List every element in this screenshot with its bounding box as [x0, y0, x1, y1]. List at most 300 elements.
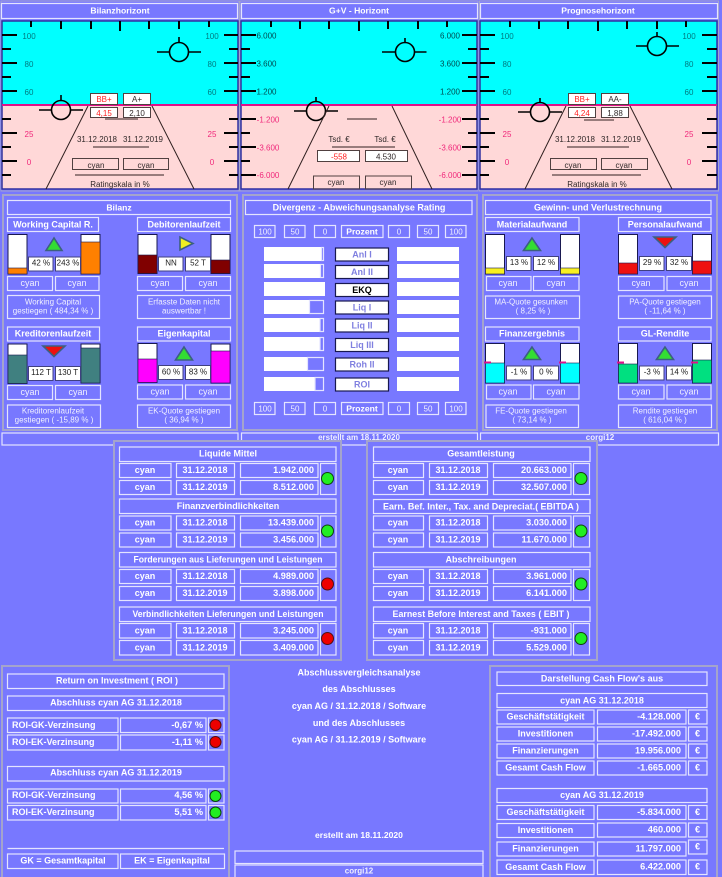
horizon display: 25: [208, 130, 217, 139]
block: cash flow 2018: -4.128.000: [637, 712, 681, 722]
card: GL-Rendite: cyan: [679, 386, 699, 396]
scale top: 100: [258, 228, 272, 236]
text block: Abschlussvergleichsanalyse: des Abschlusses: [322, 684, 396, 694]
block: Forderungen: 4.989.000: [273, 571, 314, 581]
card: GL-Rendite: GL-Rendite: [641, 328, 689, 338]
block: cash flow 2018: Investitionen: [518, 728, 573, 738]
card: Materialaufwand: cyan: [546, 278, 566, 288]
block: cash flow 2019: Gesamt Cash Flow: [505, 862, 587, 872]
block: cash flow 2019: €: [695, 862, 700, 872]
horizon display: 0: [210, 158, 215, 167]
card: GL-Rendite: Rendite gestiegen: [633, 406, 697, 416]
block: Liquide Mittel: 31.12.2019: [182, 482, 228, 492]
card: Working Capital: gestiegen ( 484,34 % ): [13, 306, 94, 316]
horizon display: cyan: [138, 161, 154, 170]
block: Abschluss 2018: -0,67 %: [171, 720, 203, 730]
block: Forderungen: 31.12.2018: [182, 571, 228, 581]
block: Verbindlichkeiten: 31.12.2018: [182, 626, 228, 636]
card: Personalaufwand: Personalaufwand: [628, 220, 702, 230]
horizon display: 25: [685, 130, 694, 139]
horizon display: 100: [22, 32, 36, 41]
card: Eigenkapital: Eigenkapital: [157, 328, 211, 338]
footer boxes: corgi12: [235, 851, 483, 877]
block: Abschreibungen: cyan: [388, 588, 408, 598]
block: Verbindlichkeiten: [120, 607, 336, 655]
heading: Divergenz: Divergenz - Abweichungsanalyse Rating: [273, 202, 445, 212]
block: Abschluss 2019: Abschluss cyan AG 31.12.2019: [50, 768, 182, 778]
block: Verbindlichkeiten: Verbindlichkeiten Lieferungen und Leistungen: [132, 609, 324, 619]
horizon display: 1.200: [256, 88, 277, 96]
block: cash flow 2019: 6.422.000: [640, 862, 681, 872]
scale top: 0: [397, 228, 402, 236]
horizon display: [2, 21, 238, 189]
heading: G+V - Horizont: G+V - Horizont: [329, 6, 389, 16]
value boxes: -558: [331, 152, 348, 162]
panel: G+V Horizont: [240, 1, 478, 191]
heading: Bilanzhorizont: Bilanzhorizont: [90, 6, 150, 16]
card: Working Capital: cyan: [67, 278, 87, 288]
horizon display: 1.200: [440, 88, 461, 96]
card: Eigenkapital: 60 %: [162, 368, 180, 376]
block: Forderungen: 3.898.000: [273, 588, 314, 598]
card: Eigenkapital: EK-Quote gestiegen: [148, 406, 220, 416]
block: Verbindlichkeiten: 3.245.000: [273, 626, 314, 636]
block: EBIT: [374, 607, 590, 655]
block: cash flow 2018: €: [695, 762, 700, 772]
horizon display: 31.12.2019: [123, 135, 164, 144]
horizon display: Tsd. €: [328, 135, 350, 144]
block: cash flow 2019: cyan AG 31.12.2019: [560, 790, 644, 800]
block: cash flow 2018: 19.956.000: [635, 746, 681, 756]
card: Kreditorenlaufzeit: gestiegen ( -15,89 % ): [15, 416, 94, 424]
horizon display: 31.12.2018: [77, 135, 118, 144]
panel: Return on Investment: [2, 666, 229, 877]
horizon display: 31.12.2018: [555, 135, 596, 144]
card: Eigenkapital: 83 %: [189, 368, 207, 376]
gauge marker 2019: [636, 32, 679, 56]
block: Finanzverbindlichkeiten: 13.439.000: [268, 518, 314, 528]
block: Abschluss 2019: ROI-EK-Verzinsung: [12, 807, 95, 817]
panel: Bilanz: [3, 195, 237, 430]
horizon display: cyan: [616, 161, 632, 170]
card: Personalaufwand: [618, 218, 712, 318]
rating boxes: 4,24: [574, 109, 590, 118]
card: Personalaufwand: 29 %: [643, 258, 661, 267]
text block: Abschlussvergleichsanalyse: Abschlussvergleichsanalyse: [297, 668, 421, 678]
card: GL-Rendite: [617, 327, 712, 428]
heading: Bilanz: Bilanz: [106, 202, 132, 212]
block: Finanzverbindlichkeiten: [120, 499, 336, 547]
rating boxes: BB+: [574, 95, 590, 104]
footer strip: corgi12: [586, 433, 615, 442]
card: GL-Rendite: 14 %: [670, 368, 688, 376]
block: cash flow 2019: €: [695, 842, 700, 852]
card: Finanzergebnis: 0 %: [539, 368, 553, 376]
block: Abschluss 2018: -1,11 %: [172, 737, 203, 747]
card: Debitorenlaufzeit: Debitorenlaufzeit: [147, 220, 221, 230]
block: cash flow 2018: €: [695, 712, 700, 722]
scale bottom: 0: [323, 404, 328, 414]
scale top: 100: [449, 228, 463, 236]
block: Gesamtleistung: 31.12.2018: [435, 465, 481, 475]
card: Personalaufwand: cyan: [631, 278, 651, 288]
card: Materialaufwand: 12 %: [537, 258, 555, 267]
block: Abschreibungen: 31.12.2018: [435, 571, 481, 581]
card: Eigenkapital: cyan: [150, 386, 170, 396]
block: Forderungen: 31.12.2019: [182, 588, 228, 598]
block: EBITDA: 31.12.2018: [435, 518, 481, 528]
card: Debitorenlaufzeit: auswertbar !: [162, 306, 206, 316]
card: Personalaufwand: ( -11,64 % ): [644, 306, 686, 316]
horizon display: -3.600: [257, 144, 280, 152]
block: cash flow 2018: Geschäftstätigkeit: [506, 712, 585, 722]
rating boxes: 2,10: [129, 109, 145, 118]
card: GL-Rendite: -3 %: [644, 368, 660, 376]
card: GL-Rendite: ( 616,04 % ): [643, 416, 687, 424]
block: Liquide Mittel: cyan: [135, 482, 155, 492]
rating boxes: [90, 94, 150, 118]
card: Working Capital: 42 %: [32, 258, 50, 268]
block: EBITDA: cyan: [388, 534, 408, 544]
rating boxes: [568, 94, 628, 118]
block: Finanzverbindlichkeiten: cyan: [135, 534, 155, 544]
block: cash flow 2019: €: [695, 807, 700, 817]
block: Liquide Mittel: 8.512.000: [273, 482, 314, 492]
horizon display: -3.600: [439, 144, 462, 152]
card: Materialaufwand: MA-Quote gesunken: [494, 298, 568, 306]
block: cash flow 2019: Finanzierungen: [512, 844, 579, 854]
card: Finanzergebnis: Finanzergebnis: [499, 328, 565, 338]
text block: Abschlussvergleichsanalyse: cyan AG / 31.12.2018 / Software: [292, 701, 426, 711]
horizon display: 0: [505, 158, 510, 167]
block: EBIT: 5.529.000: [526, 642, 567, 652]
horizon display: 60: [503, 88, 512, 97]
block: Abschluss 2018: ROI-EK-Verzinsung: [12, 737, 95, 747]
card: Working Capital: cyan: [20, 278, 40, 288]
block: Gesamtleistung: 31.12.2019: [435, 482, 481, 492]
horizon display: [241, 21, 477, 189]
card: Finanzergebnis: [484, 327, 580, 428]
block: Verbindlichkeiten: cyan: [135, 642, 155, 652]
block: cash flow 2018: -17.492.000: [632, 728, 681, 738]
card: Eigenkapital: cyan: [198, 386, 218, 396]
card: Working Capital: Working Capital R.: [13, 220, 93, 230]
horizon display: 6.000: [256, 32, 277, 40]
heading: G+V - Horizont: [242, 4, 478, 18]
rating boxes: BB+: [96, 95, 112, 104]
horizon display: 100: [500, 32, 514, 41]
card: Debitorenlaufzeit: 52 T: [190, 258, 206, 268]
block: Abschreibungen: 31.12.2019: [435, 588, 481, 598]
block: Finanzverbindlichkeiten: 31.12.2018: [182, 518, 228, 528]
horizon display: 3.600: [440, 60, 461, 68]
block: Gesamtleistung: 32.507.000: [521, 482, 567, 492]
scale top: 50: [291, 228, 300, 236]
block: cash flow 2018: Gesamt Cash Flow: [505, 762, 587, 772]
heading: Divergenz: [246, 200, 472, 214]
card: Debitorenlaufzeit: NN: [165, 258, 177, 268]
heading: Return on Investment: [8, 674, 224, 688]
block: Liquide Mittel: cyan: [135, 465, 155, 475]
block: EBITDA: cyan: [388, 518, 408, 528]
panel: Liquide Mittel and liabilities: [114, 441, 341, 660]
block: Abschluss 2019: [8, 766, 224, 820]
rating rows: Liq III: [350, 340, 374, 350]
block: Verbindlichkeiten: 31.12.2019: [182, 642, 228, 652]
block: cash flow 2018: [497, 694, 707, 775]
block: Liquide Mittel: 1.942.000: [273, 465, 314, 475]
gauge marker 2019: [157, 37, 201, 62]
scale bottom: Prozent: [346, 404, 378, 414]
card: Finanzergebnis: ( 73,14 % ): [512, 416, 552, 424]
block: cash flow 2018: Finanzierungen: [512, 746, 579, 756]
rating boxes: A+: [132, 95, 142, 104]
legend: [8, 848, 224, 868]
footer strip: [2, 433, 718, 445]
block: cash flow 2018: €: [695, 746, 700, 756]
block: cash flow 2018: -1.665.000: [637, 762, 681, 772]
block: EBIT: 31.12.2018: [435, 626, 481, 636]
horizon display: cyan: [565, 161, 581, 170]
horizon display: 80: [503, 60, 512, 69]
text block: Abschlussvergleichsanalyse: cyan AG / 31.12.2019 / Software: [292, 734, 426, 744]
horizon display: 60: [685, 88, 694, 97]
gauge marker 2018: [39, 95, 83, 120]
card: Finanzergebnis: -1 %: [511, 368, 527, 376]
horizon display: 31.12.2019: [601, 135, 642, 144]
block: Forderungen: Forderungen aus Lieferungen und Leistungen: [134, 554, 322, 564]
horizon display: 100: [205, 32, 219, 41]
card: Finanzergebnis: cyan: [546, 386, 566, 396]
block: EBITDA: [374, 500, 590, 547]
block: EBIT: Earnest Before Interest and Taxes ( EBIT ): [392, 609, 570, 619]
block: cash flow 2019: Investitionen: [518, 825, 573, 835]
rating rows: ROI: [354, 380, 370, 390]
scale bottom: 100: [449, 404, 463, 414]
card: Finanzergebnis: FE-Quote gestiegen: [495, 406, 567, 416]
block: Forderungen: cyan: [135, 588, 155, 598]
footer strip: erstellt am 18.11.2020: [318, 433, 400, 442]
scale top: 50: [424, 228, 433, 236]
block: Finanzverbindlichkeiten: cyan: [135, 518, 155, 528]
card: Working Capital: 243 %: [57, 258, 79, 268]
value boxes: [318, 150, 408, 162]
card: Personalaufwand: cyan: [679, 278, 699, 288]
block: Abschreibungen: Abschreibungen: [445, 554, 517, 564]
block: Abschreibungen: 3.961.000: [526, 571, 567, 581]
horizon display: Tsd. €: [374, 135, 396, 144]
panel: Bilanzhorizont: [1, 1, 239, 191]
block: Gesamtleistung: [374, 447, 590, 494]
horizon display: Ratingskala in %: [567, 180, 627, 189]
block: Gesamtleistung: cyan: [388, 465, 408, 475]
block: Abschluss 2018: [8, 696, 224, 750]
horizon display: cyan: [88, 161, 104, 170]
card: Debitorenlaufzeit: cyan: [198, 278, 218, 288]
horizon display: 80: [208, 60, 217, 69]
horizon display: -1.200: [257, 116, 280, 124]
block: cash flow 2018: cyan AG 31.12.2018: [560, 696, 644, 706]
card: Materialaufwand: ( 8,25 % ): [516, 306, 551, 316]
text block: Abschlussvergleichsanalyse: [292, 668, 426, 744]
horizon display: 80: [685, 60, 694, 69]
block: cash flow 2019: 460.000: [648, 824, 681, 834]
scale bottom: 50: [291, 404, 300, 414]
card: Personalaufwand: 32 %: [670, 258, 688, 267]
scale top: Prozent: [346, 226, 378, 236]
panel: Divergenz: [243, 195, 477, 430]
block: cash flow 2018: €: [695, 728, 700, 738]
footer boxes: corgi12: corgi12: [345, 866, 374, 876]
card: Materialaufwand: cyan: [498, 278, 518, 288]
horizon display: 100: [682, 32, 696, 41]
horizon display: 80: [25, 60, 34, 69]
horizon display: 25: [503, 130, 512, 139]
card: Materialaufwand: 13 %: [510, 258, 528, 267]
block: cash flow 2019: [497, 788, 707, 874]
card: Working Capital: [8, 218, 100, 318]
block: Abschluss 2018: ROI-GK-Verzinsung: [12, 720, 96, 730]
scale top: 0: [323, 228, 328, 236]
gauge marker 2019: [382, 38, 426, 62]
block: Abschluss 2018: Abschluss cyan AG 31.12.2018: [50, 698, 182, 708]
card: Kreditorenlaufzeit: [8, 327, 100, 428]
card: Materialaufwand: [486, 218, 580, 318]
horizon display: -6.000: [257, 171, 280, 180]
block: Forderungen: [120, 552, 336, 600]
card: Kreditorenlaufzeit: Kreditorenlaufzeit: [15, 328, 91, 338]
block: Gesamtleistung: 20.663.000: [521, 465, 567, 475]
scale bottom: 100: [258, 404, 272, 414]
block: Finanzverbindlichkeiten: 3.456.000: [273, 534, 314, 544]
block: Abschreibungen: [374, 552, 590, 600]
horizon display: -1.200: [439, 116, 462, 124]
heading: Darstellung Cash Flow's aus: [497, 672, 707, 686]
block: Abschreibungen: 6.141.000: [526, 588, 567, 598]
block: cash flow 2019: 11.797.000: [636, 844, 681, 854]
block: EBITDA: 3.030.000: [526, 518, 567, 528]
block: Verbindlichkeiten: cyan: [135, 626, 155, 636]
block: EBITDA: 11.670.000: [522, 534, 567, 544]
horizon display: cyan: [380, 178, 396, 187]
scale bottom: 0: [397, 404, 402, 414]
scale bottom: 50: [424, 404, 433, 414]
heading: Gewinn- und Verlustrechnung: [486, 200, 711, 214]
rating rows: Liq II: [352, 320, 372, 330]
card: Kreditorenlaufzeit: Kreditorenlaufzeit: [22, 406, 85, 416]
block: Gesamtleistung: Gesamtleistung: [447, 448, 515, 458]
heading: Bilanz: [8, 200, 230, 214]
card: GL-Rendite: cyan: [631, 386, 651, 396]
block: EBIT: cyan: [388, 626, 408, 636]
block: Liquide Mittel: Liquide Mittel: [199, 448, 257, 458]
card: Eigenkapital: [138, 327, 230, 428]
panel: Prognosehorizont: [480, 1, 718, 191]
block: EBIT: cyan: [388, 642, 408, 652]
block: Finanzverbindlichkeiten: Finanzverbindlichkeiten: [177, 501, 279, 511]
text block: Abschlussvergleichsanalyse: und des Abschlusses: [313, 718, 405, 728]
horizon display: 6.000: [440, 32, 461, 40]
rating rows: Liq I: [353, 302, 371, 312]
block: Abschreibungen: cyan: [388, 571, 408, 581]
card: Working Capital: Working Capital: [25, 298, 81, 306]
value boxes: 4.530: [376, 152, 397, 162]
block: EBIT: -931.000: [531, 626, 567, 636]
rating boxes: 4,15: [96, 109, 112, 118]
heading: Darstellung Cash Flow's aus: Darstellung Cash Flow's aus: [541, 674, 663, 684]
rating rows: EKQ: [352, 285, 372, 295]
rating boxes: AA-: [608, 95, 622, 104]
panel: Cash Flow: [490, 666, 717, 877]
block: EBIT: 31.12.2019: [435, 642, 481, 652]
card: Debitorenlaufzeit: cyan: [150, 278, 170, 288]
card: Debitorenlaufzeit: [138, 218, 230, 318]
block: Abschluss 2019: 4,56 %: [174, 790, 203, 800]
block: Abschluss 2019: ROI-GK-Verzinsung: [12, 790, 96, 800]
horizon display: 3.600: [256, 60, 277, 68]
card: Finanzergebnis: cyan: [498, 386, 518, 396]
card: Kreditorenlaufzeit: cyan: [20, 387, 40, 397]
card: Personalaufwand: PA-Quote gestiegen: [629, 298, 701, 306]
heading: Bilanzhorizont: [2, 4, 238, 18]
scale top: [254, 226, 466, 238]
rating rows: Anl II: [351, 267, 373, 277]
block: EBITDA: Earn. Bef. Inter., Tax. and Depreciat.( EBITDA ): [383, 502, 579, 512]
block: cash flow 2019: -5.834.000: [637, 807, 681, 817]
block: Verbindlichkeiten: 3.409.000: [273, 642, 314, 652]
rating rows: [264, 247, 459, 391]
block: Finanzverbindlichkeiten: 31.12.2019: [182, 534, 228, 544]
block: cash flow 2019: €: [695, 824, 700, 834]
block: cash flow 2019: Geschäftstätigkeit: [506, 807, 585, 817]
text: erstellt am: erstellt am 18.11.2020: [315, 830, 403, 840]
horizon display: -6.000: [439, 171, 462, 180]
block: EBITDA: 31.12.2019: [435, 534, 481, 544]
card: Kreditorenlaufzeit: 112 T: [31, 368, 51, 377]
block: Forderungen: cyan: [135, 571, 155, 581]
card: Eigenkapital: ( 36,94 % ): [164, 416, 204, 424]
horizon display: 0: [687, 158, 692, 167]
horizon display: [480, 21, 717, 189]
rating rows: Roh II: [350, 360, 374, 370]
card: Kreditorenlaufzeit: cyan: [68, 387, 88, 397]
heading: Prognosehorizont: [480, 4, 718, 18]
horizon display: Ratingskala in %: [90, 180, 150, 189]
horizon display: 60: [25, 88, 34, 97]
rating boxes: 1,88: [607, 109, 623, 118]
scale bottom: [254, 402, 466, 414]
card: Materialaufwand: Materialaufwand: [497, 220, 567, 230]
horizon display: 25: [25, 130, 34, 139]
heading: Gewinn- und Verlustrechnung: Gewinn- und Verlustrechnung: [534, 202, 662, 212]
block: Gesamtleistung: cyan: [388, 482, 408, 492]
legend: EK = Eigenkapital: [134, 856, 210, 866]
horizon display: cyan: [328, 178, 344, 187]
block: Liquide Mittel: [120, 447, 336, 494]
heading: Return on Investment: Return on Investment ( ROI ): [56, 676, 178, 686]
gauge marker 2018: [294, 97, 338, 120]
gauge marker 2018: [518, 98, 562, 122]
card: Debitorenlaufzeit: Erfasste Daten nicht: [148, 298, 221, 306]
panel: Gewinn- und Verlustrechnung: [483, 195, 717, 430]
heading: Prognosehorizont: Prognosehorizont: [561, 6, 635, 16]
legend: GK = Gesamtkapital: [20, 856, 106, 866]
horizon display: 0: [27, 158, 32, 167]
horizon display: 60: [208, 88, 217, 97]
block: Abschluss 2019: 5,51 %: [174, 807, 203, 817]
panel: Gesamtleistung and earnings: [367, 441, 597, 660]
block: Liquide Mittel: 31.12.2018: [182, 465, 228, 475]
